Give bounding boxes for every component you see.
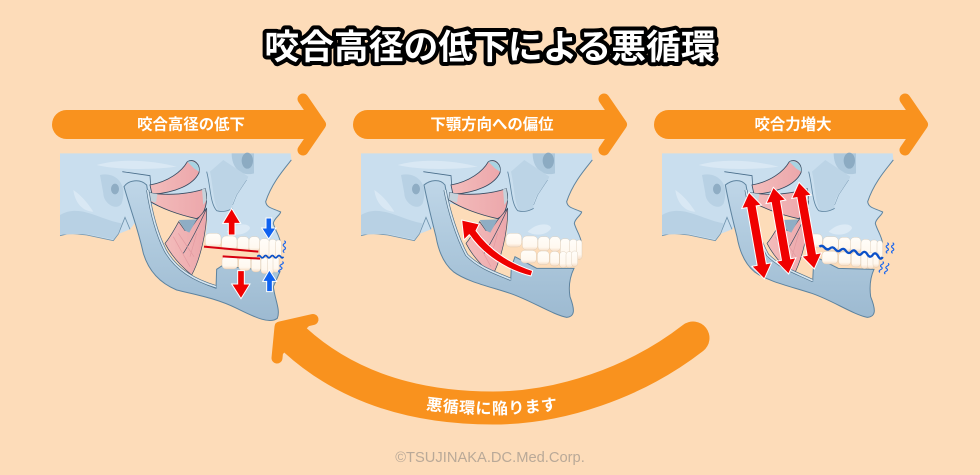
- mandible: [124, 181, 280, 321]
- step arrow 2: 下顎方向への偏位: [430, 114, 554, 134]
- panel: increased bite force: [662, 153, 894, 317]
- blue down arrow: [262, 218, 276, 239]
- blue bite line: [257, 255, 283, 258]
- upper teeth: [205, 233, 281, 259]
- blue bite line: [819, 246, 883, 259]
- red gap lines: [204, 247, 260, 259]
- copyright: ©TSUJINAKA.DC.Med.Corp.: [395, 450, 585, 466]
- double arrow 2: [763, 186, 798, 276]
- red curved arrow: [462, 220, 533, 276]
- curved cycle arrow: 悪循環に陥ります: [426, 396, 556, 416]
- curved cycle arrow: [272, 314, 710, 424]
- mandible: [725, 181, 874, 317]
- step arrow 1: 咬合高径の低下: [137, 116, 245, 134]
- lower teeth: [521, 250, 578, 268]
- title: 咬合高径の低下による悪循環: [264, 28, 716, 67]
- red up arrow: [223, 208, 241, 235]
- step arrow 2: [353, 99, 622, 150]
- upper teeth: [807, 234, 883, 260]
- lower teeth: [822, 251, 879, 269]
- double arrow 3: [789, 181, 824, 271]
- step arrow 3: [654, 99, 922, 150]
- double arrow 1: [739, 191, 774, 281]
- panel: jaw with reduced occlusal height: [60, 153, 291, 321]
- upper teeth: [506, 233, 582, 259]
- lower teeth: [222, 256, 279, 274]
- red down arrow: [232, 271, 250, 299]
- blue up arrow: [263, 270, 277, 292]
- vibration marks: [279, 241, 285, 272]
- step arrow 3: 咬合力増大: [755, 114, 831, 134]
- panel: mandible displaced backward: [361, 153, 592, 317]
- vibration marks: [879, 243, 894, 274]
- step arrow 1: [52, 99, 320, 150]
- mandible: [424, 181, 574, 317]
